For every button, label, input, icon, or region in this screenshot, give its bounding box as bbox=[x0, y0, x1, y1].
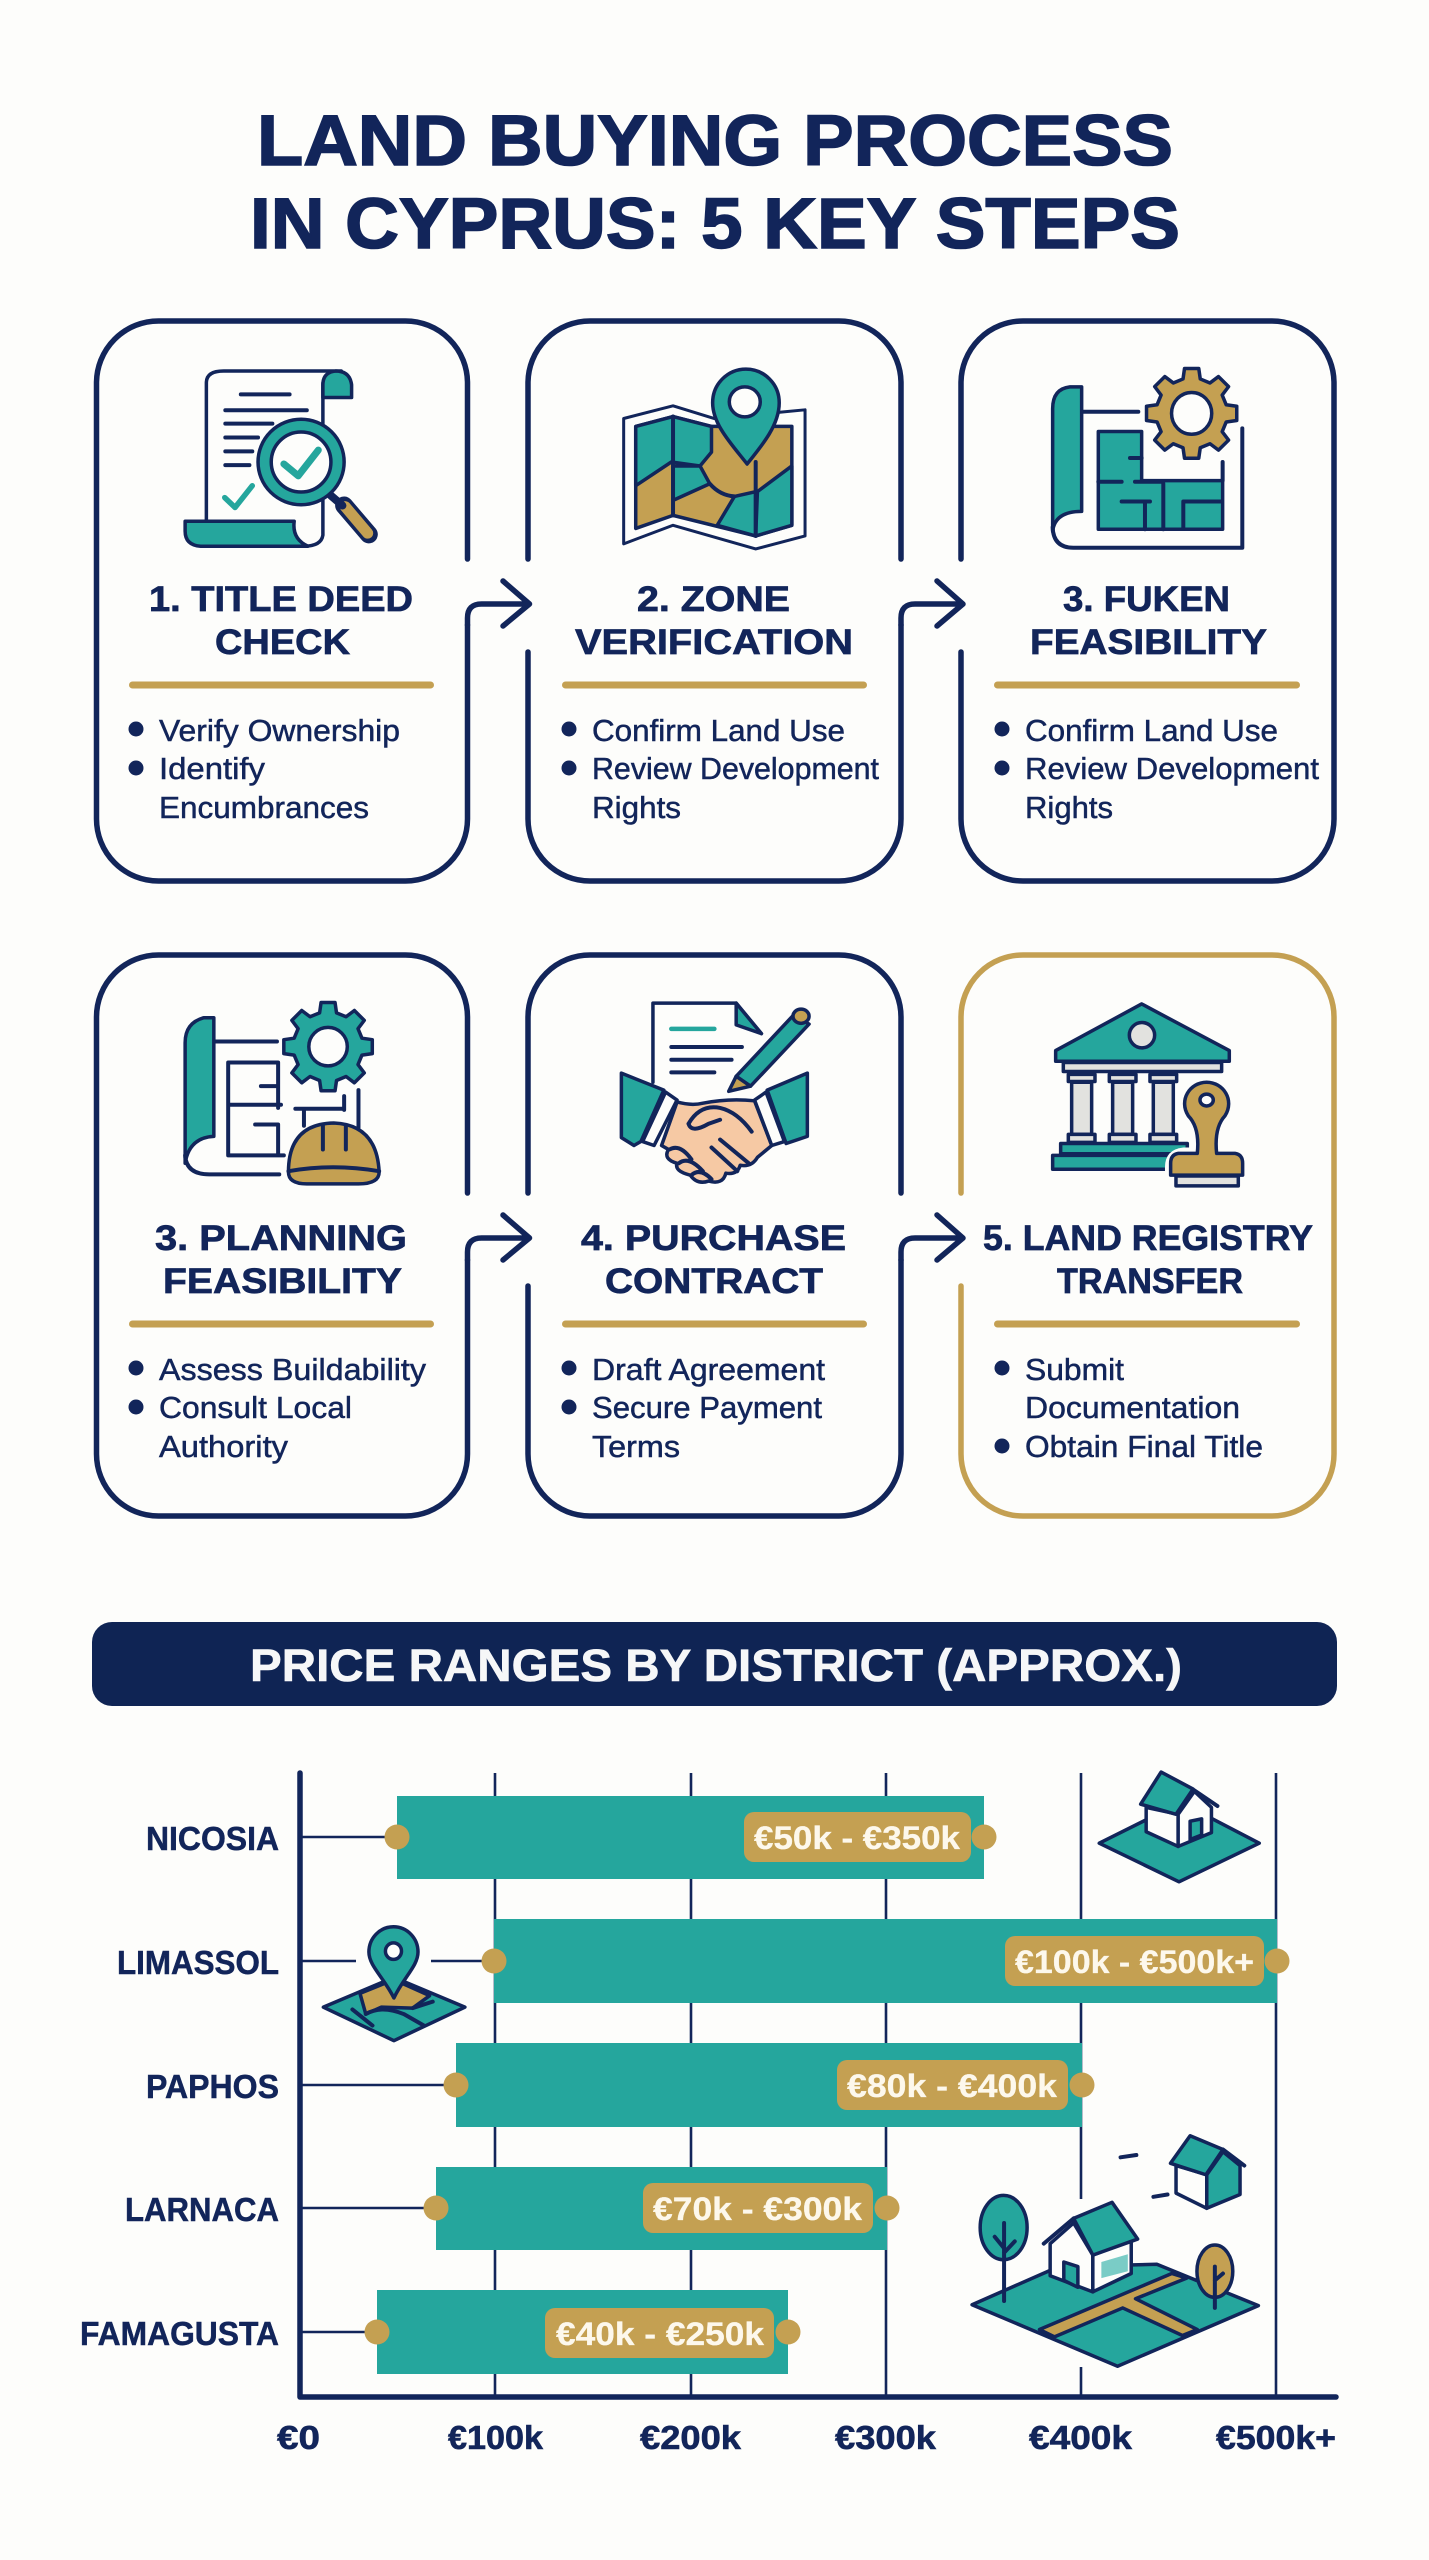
row: Famagusta bbox=[80, 2290, 800, 2374]
bullet list 5: Secure Payment bbox=[592, 1390, 822, 1425]
panel: step 1 title deed check bbox=[96, 321, 468, 881]
card outline 4 bbox=[96, 955, 468, 1516]
bullet list 5 bbox=[562, 1352, 825, 1464]
banner: price ranges heading: PRICE RANGES BY DISTRICT (APPROX.) bbox=[250, 1640, 1182, 1691]
bullet list 5: Terms bbox=[592, 1429, 680, 1464]
bullet list 1: Verify Ownership bbox=[159, 713, 400, 748]
row: Larnaca: €70k - €300k bbox=[653, 2191, 862, 2227]
heading 6 bbox=[983, 1219, 1313, 1301]
bullet list 6 bbox=[994, 1352, 1263, 1464]
icon: map plot with pin bbox=[323, 1927, 465, 2041]
row: Limassol: €100k - €500k+ bbox=[1015, 1944, 1254, 1980]
row: Limassol: LIMASSOL bbox=[117, 1944, 279, 1981]
panel: step 3 planning feasibility bbox=[96, 955, 468, 1516]
bullet list 4: Authority bbox=[159, 1429, 289, 1464]
row: Larnaca: LARNACA bbox=[125, 2191, 279, 2228]
row: Limassol bbox=[117, 1919, 1290, 2003]
bullet list 4: Assess Buildability bbox=[159, 1352, 427, 1387]
heading 3: 3. FUKEN bbox=[1063, 580, 1230, 619]
bullet list 3 bbox=[994, 713, 1319, 825]
row: Famagusta: €40k - €250k bbox=[556, 2316, 764, 2352]
title: LAND BUYING PROCESS bbox=[257, 102, 1173, 181]
icon: title deed with magnifier bbox=[185, 371, 369, 546]
gold divider 3 bbox=[994, 682, 1300, 688]
bullet list 1 bbox=[128, 713, 400, 825]
panel: step 3 feasibility (top row) bbox=[961, 321, 1334, 881]
heading 6: TRANSFER bbox=[1057, 1262, 1243, 1301]
bullet list 2: Rights bbox=[592, 790, 681, 825]
x-axis labels: €0 bbox=[277, 2419, 320, 2456]
arrow: step 3 to 4 bbox=[468, 1215, 530, 1260]
heading 2: VERIFICATION bbox=[575, 623, 853, 662]
heading 5: CONTRACT bbox=[605, 1262, 823, 1301]
x-axis labels: €500k+ bbox=[1216, 2419, 1336, 2456]
heading 2: 2. ZONE bbox=[637, 580, 790, 619]
arrow: step 4 to 5 bbox=[901, 1215, 963, 1260]
x-axis labels: €100k bbox=[448, 2419, 544, 2456]
row: Paphos bbox=[146, 2043, 1094, 2127]
gold divider 5 bbox=[562, 1320, 867, 1328]
gold divider 4 bbox=[129, 1320, 434, 1328]
x-axis labels: €400k bbox=[1029, 2419, 1133, 2456]
heading 4: FEASIBILITY bbox=[163, 1262, 402, 1301]
bullet list 6: Documentation bbox=[1025, 1390, 1240, 1425]
arrow: step 2 to 3 bbox=[901, 581, 963, 626]
heading 2 bbox=[575, 580, 853, 662]
bullet list 6: Submit bbox=[1025, 1352, 1124, 1387]
icon: registry building with stamp bbox=[1053, 1004, 1243, 1191]
row: Nicosia bbox=[146, 1796, 996, 1879]
bullet list 2: Review Development bbox=[592, 751, 879, 786]
heading 1: 1. TITLE DEED bbox=[149, 580, 413, 619]
card outline 3 bbox=[961, 321, 1334, 881]
row: Famagusta: FAMAGUSTA bbox=[80, 2315, 279, 2352]
icon: blueprint, teal gear and hard hat bbox=[185, 1002, 379, 1184]
bullet list 4: Consult Local bbox=[159, 1390, 352, 1425]
heading 5: 4. PURCHASE bbox=[581, 1219, 846, 1258]
panel: step 2 zone verification bbox=[528, 321, 901, 881]
title bbox=[250, 102, 1180, 264]
heading 3 bbox=[1030, 580, 1267, 662]
card outline 1 bbox=[96, 321, 468, 881]
bullet list 3: Review Development bbox=[1025, 751, 1319, 786]
heading 1: CHECK bbox=[215, 623, 350, 662]
heading 4: 3. PLANNING bbox=[155, 1219, 407, 1258]
icon: village with road and trees bbox=[972, 2136, 1258, 2366]
x-axis labels: €300k bbox=[835, 2419, 937, 2456]
row: Nicosia: €50k - €350k bbox=[754, 1820, 960, 1856]
heading 4 bbox=[155, 1219, 407, 1301]
title: IN CYPRUS: 5 KEY STEPS bbox=[250, 185, 1180, 264]
bullet list 2: Confirm Land Use bbox=[592, 713, 845, 748]
arrow: step 1 to 2 bbox=[468, 581, 530, 626]
bullet list 3: Rights bbox=[1025, 790, 1113, 825]
heading 3: FEASIBILITY bbox=[1030, 623, 1267, 662]
heading 1 bbox=[149, 580, 413, 662]
banner: price ranges heading bbox=[92, 1622, 1337, 1706]
gold divider 1 bbox=[129, 682, 434, 688]
row: Nicosia: NICOSIA bbox=[146, 1820, 279, 1857]
panel: step 4 purchase contract bbox=[528, 955, 901, 1516]
icon: single house on plot bbox=[1099, 1772, 1259, 1882]
gold divider 2 bbox=[562, 682, 867, 688]
bullet list 2 bbox=[562, 713, 879, 825]
gold divider 6 bbox=[994, 1320, 1300, 1328]
row: Paphos: €80k - €400k bbox=[847, 2068, 1057, 2104]
heading 6: 5. LAND REGISTRY bbox=[983, 1219, 1313, 1258]
card outline 5 bbox=[528, 955, 901, 1516]
card outline 2 bbox=[528, 321, 901, 881]
icon: zoning map with pin bbox=[624, 369, 805, 549]
bullet list 4 bbox=[128, 1352, 427, 1464]
bullet list 3: Confirm Land Use bbox=[1025, 713, 1278, 748]
card outline 6 (gold) bbox=[961, 955, 1334, 1516]
bullet list 1: Encumbrances bbox=[159, 790, 369, 825]
x-axis labels bbox=[277, 2419, 1336, 2456]
icon: blueprint with gold gear bbox=[1053, 368, 1242, 548]
x-axis labels: €200k bbox=[640, 2419, 742, 2456]
icon: contract, pen and handshake bbox=[621, 1003, 809, 1182]
heading 5 bbox=[581, 1219, 846, 1301]
panel: step 5 land registry transfer bbox=[961, 955, 1334, 1516]
row: Larnaca bbox=[125, 2167, 900, 2250]
bullet list 6: Obtain Final Title bbox=[1025, 1429, 1263, 1464]
bullet list 5: Draft Agreement bbox=[592, 1352, 825, 1387]
row: Paphos: PAPHOS bbox=[146, 2068, 279, 2105]
chart: price ranges by district bbox=[80, 1772, 1336, 2456]
bullet list 1: Identify bbox=[159, 751, 266, 786]
